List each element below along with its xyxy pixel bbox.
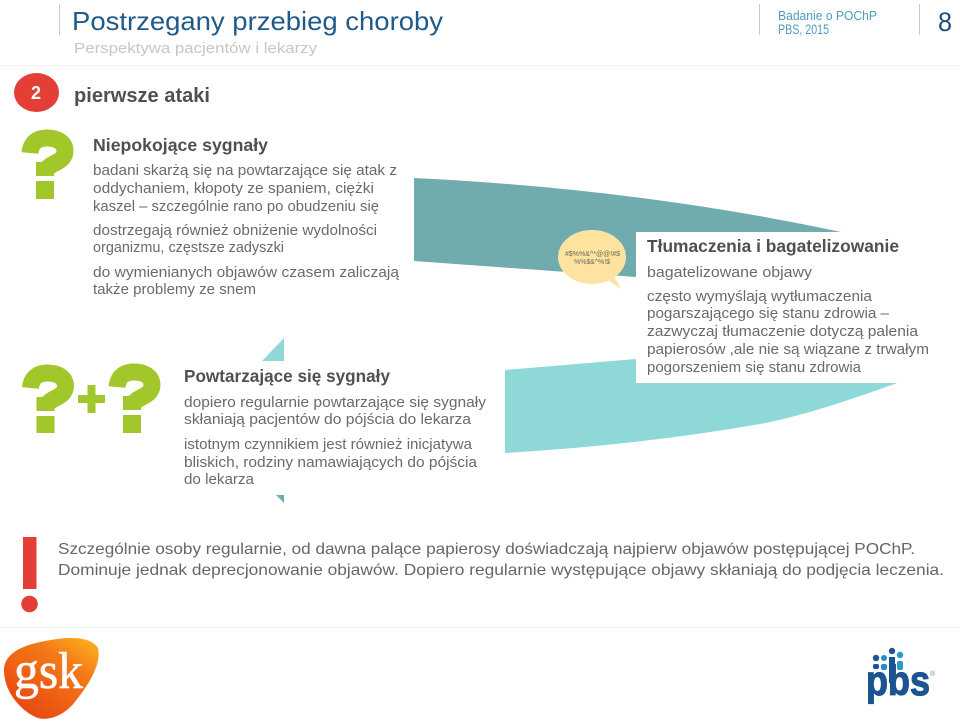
title: Postrzegany przebieg choroby <box>72 6 443 36</box>
text block: warning signals: także problemy ze snem <box>93 281 256 298</box>
text block: repeating signals: istotnym czynnikiem jest również inicjatywa <box>184 436 473 453</box>
callout: Szczególnie osoby regularnie, od dawna palące papierosy doświadczają najpierw objawów postępującej POChP. <box>58 541 915 558</box>
page number: 8 <box>938 7 952 37</box>
text block: warning signals: badani skarżą się na powtarzające się atak z <box>93 162 397 179</box>
heading: repeating signals: Powtarzające się sygnały <box>184 366 390 386</box>
subtitle: Perspektywa pacjentów i lekarzy <box>74 40 318 57</box>
section badge <box>14 73 59 112</box>
panel: repeating signals <box>184 366 487 488</box>
logo: gsk <box>4 638 99 719</box>
panel: warning signals <box>93 135 400 298</box>
text block: repeating signals: dopiero regularnie powtarzające się sygnały <box>184 394 487 411</box>
heading: warning signals: Niepokojące sygnały <box>93 135 268 155</box>
text block: warning signals: do wymienianych objawów czasem zaliczają <box>93 264 400 281</box>
text block: explanations: pogorszeniem się stanu zdrowia <box>647 359 862 376</box>
small teal triangle bottom <box>276 495 284 503</box>
source note: PBS, 2015 <box>778 22 829 37</box>
logo: pbs: ® <box>930 670 936 678</box>
text block: explanations: często wymyślają wytłumaczenia <box>647 288 873 305</box>
icon: question mark plus question mark <box>30 372 152 433</box>
source note <box>759 4 877 37</box>
speech bubble: %%$&^%!$ <box>574 259 610 266</box>
dark teal ribbon <box>414 178 841 277</box>
callout: Dominuje jednak deprecjonowanie objawów. Dopiero regularnie występujące objawy skłaniają do podjęcia leczenia. <box>58 562 944 579</box>
heading: explanations: Tłumaczenia i bagatelizowanie <box>647 236 899 256</box>
logo: gsk: gsk <box>14 643 83 700</box>
text block: repeating signals: skłaniają pacjentów do pójścia do lekarza <box>184 411 472 428</box>
speech bubble <box>558 230 626 289</box>
icon: exclamation mark <box>21 537 38 612</box>
section badge: 2 <box>31 83 41 103</box>
light teal ribbon <box>505 359 897 453</box>
header divider <box>0 65 960 66</box>
text block: warning signals: organizmu, częstsze zadyszki <box>93 239 284 256</box>
text block: repeating signals: bliskich, rodziny namawiających do pójścia <box>184 454 478 471</box>
text block: explanations: bagatelizowane objawy <box>647 264 813 281</box>
source note: Badanie o POChP <box>778 8 877 23</box>
small teal triangle top <box>262 338 284 361</box>
text block: explanations: pogarszającego się stanu zdrowia – <box>647 305 890 322</box>
page number <box>919 4 952 37</box>
text block: warning signals <box>93 162 400 298</box>
text block: explanations <box>647 264 929 376</box>
text block: repeating signals <box>184 394 487 488</box>
text block: explanations: papierosów ,ale nie są wiązane z trwałym <box>647 341 929 358</box>
text block: warning signals: oddychaniem, kłopoty ze spaniem, ciężki <box>93 180 374 197</box>
speech bubble: #$%%&^*@@!#$ <box>565 251 620 258</box>
icon: question mark <box>30 138 65 199</box>
text block: repeating signals: do lekarza <box>184 471 255 488</box>
panel: explanations <box>647 236 929 376</box>
callout <box>58 541 944 579</box>
text block: warning signals: dostrzegają również obniżenie wydolności <box>93 222 377 239</box>
logo: pbs: pbs <box>866 657 930 704</box>
section heading: pierwsze ataki <box>74 85 210 107</box>
text block: explanations: zazwyczaj tłumaczenie dotyczą palenia <box>647 323 919 340</box>
text block: warning signals: kaszel – szczególnie rano po obudzeniu się <box>93 198 379 215</box>
footer divider <box>0 627 960 628</box>
